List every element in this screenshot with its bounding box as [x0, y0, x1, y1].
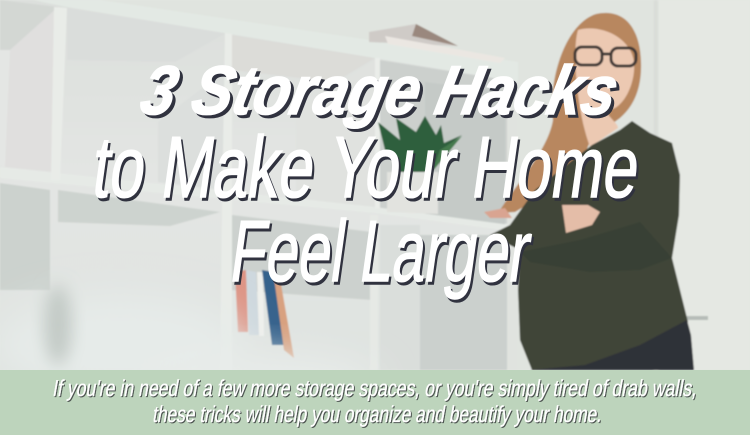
crossed forearm shading [520, 222, 672, 272]
face and neck [575, 28, 634, 147]
books on top shelf [369, 24, 505, 63]
shelf boards [33, 0, 518, 82]
title line 1 shadow: 3 Storage Hacks [138, 55, 628, 132]
hair [498, 13, 641, 213]
shelving unit [0, 0, 518, 370]
shirt [490, 121, 688, 370]
books on lower shelf [235, 270, 294, 358]
title [87, 52, 648, 303]
blurred foreground [0, 295, 245, 395]
title line 1: 3 Storage Hacks [135, 52, 625, 129]
hands [562, 205, 600, 233]
jeans [530, 320, 694, 370]
potted plant [378, 116, 462, 214]
title line 3: Feel Larger [225, 202, 537, 300]
intro line 2 shadow: these tricks will help you organize and beautify your home. [152, 402, 606, 428]
intro line 2: these tricks will help you organize and beautify your home. [151, 401, 605, 427]
title line 3 shadow: Feel Larger [227, 205, 539, 303]
intro banner [0, 370, 750, 435]
woman [484, 13, 694, 370]
glasses [575, 47, 636, 66]
small handle on wall [686, 316, 708, 320]
